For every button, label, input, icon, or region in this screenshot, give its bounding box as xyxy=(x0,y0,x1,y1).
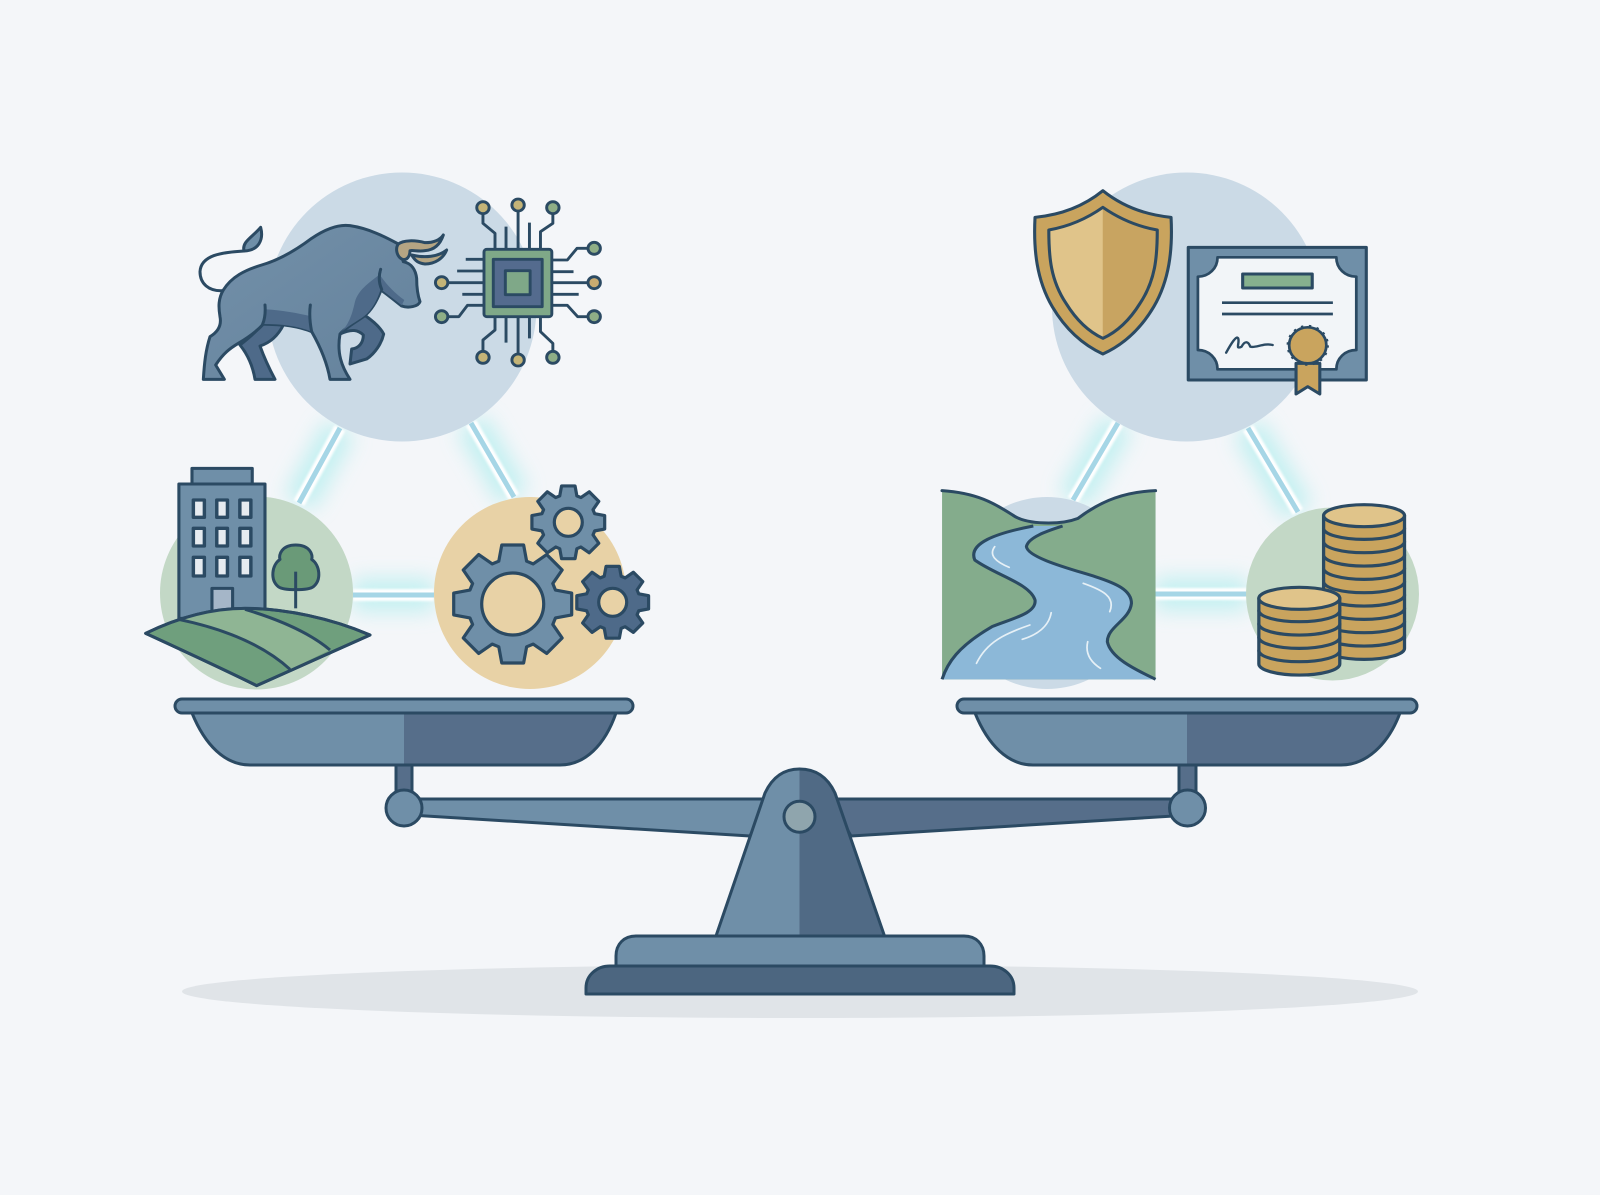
icon: river landscape xyxy=(942,491,1156,679)
left knob xyxy=(386,790,422,826)
circle: green left backdrop xyxy=(160,496,353,690)
gear: small right xyxy=(577,566,649,638)
left pan xyxy=(175,699,633,765)
base lower tier xyxy=(586,966,1014,994)
right stem xyxy=(1179,765,1196,795)
icon: circuit chip xyxy=(435,199,600,366)
pivot post xyxy=(716,769,884,936)
connector triangle: right group xyxy=(1073,423,1298,594)
beam: right arm xyxy=(830,799,1190,836)
circle: top left backdrop xyxy=(268,172,536,442)
circle: coins backdrop xyxy=(1246,508,1419,680)
coins: tall stack xyxy=(1324,505,1405,659)
icon: office building xyxy=(179,468,265,618)
gear: large xyxy=(454,545,572,663)
icon: bull xyxy=(200,225,447,379)
circle: top right backdrop xyxy=(1052,172,1321,442)
icon: shield xyxy=(1035,191,1171,354)
beam: left arm xyxy=(410,799,770,836)
icon: certificate xyxy=(1188,247,1366,394)
right pan xyxy=(957,699,1417,765)
icon: gears xyxy=(454,486,649,663)
left stem xyxy=(396,765,412,795)
icon: tree and farmland xyxy=(146,545,370,686)
circle: tan gears backdrop xyxy=(434,497,626,689)
gear: small top xyxy=(532,486,605,559)
connector triangle: left group xyxy=(299,423,514,595)
circle: river backdrop xyxy=(951,497,1143,689)
coins: short stack xyxy=(1259,587,1340,675)
scale xyxy=(175,699,1417,994)
icon: coin stacks xyxy=(1259,505,1405,675)
ground shadow xyxy=(182,965,1418,1018)
base upper tier xyxy=(616,936,984,966)
right knob xyxy=(1170,790,1206,826)
